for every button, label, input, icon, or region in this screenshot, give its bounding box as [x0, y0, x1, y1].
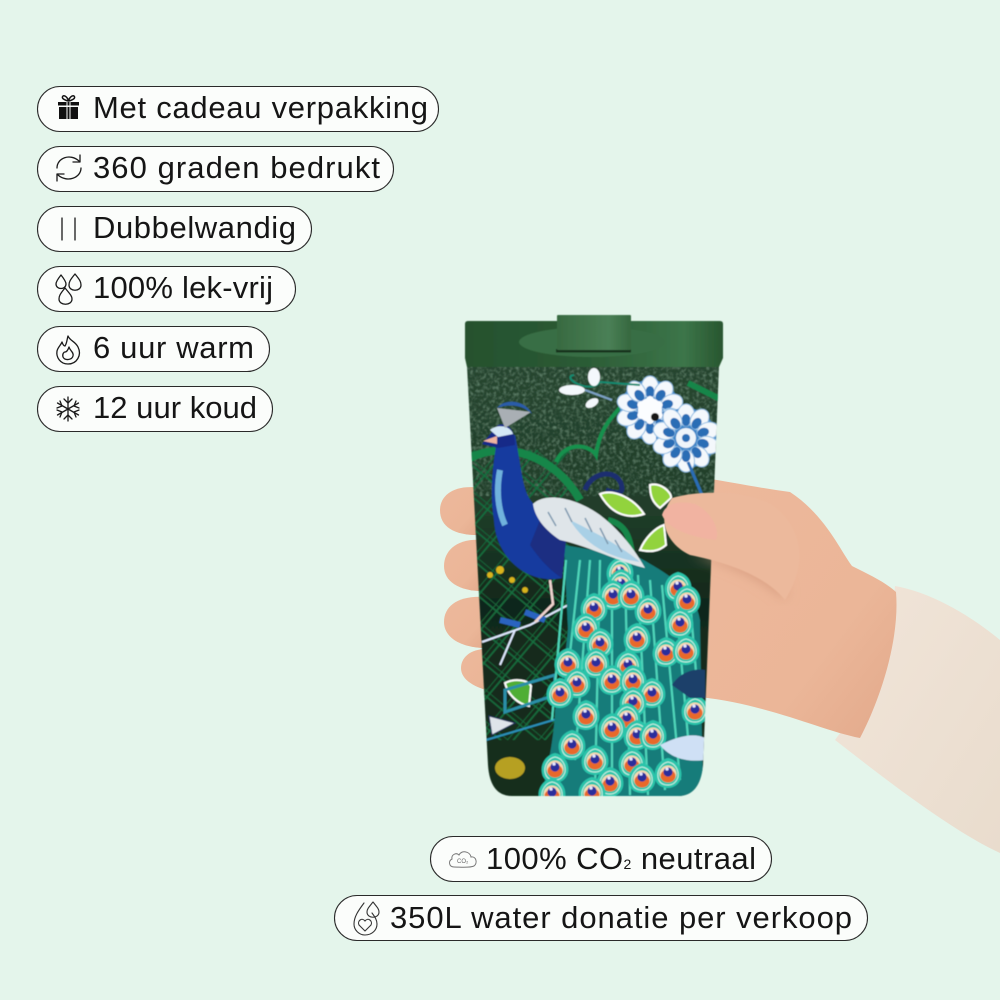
icon: snowflake — [57, 397, 79, 421]
icon: flame — [57, 336, 79, 364]
feature pills — [38, 86, 438, 432]
lid tab — [557, 315, 631, 350]
pill: 12 hours cold — [38, 386, 272, 432]
peacock body — [482, 402, 645, 622]
pill: CO2 neutral: 100% CO2 neutraal — [486, 841, 756, 876]
icon: CO2 cloud — [450, 852, 476, 867]
lower left branch and leaves — [482, 566, 568, 779]
hand: thumb over the tumbler — [662, 493, 799, 600]
icon: double wall lines — [62, 218, 75, 240]
pill: leak free — [38, 266, 296, 312]
pill: CO2 neutral — [430, 836, 772, 882]
hand: palm and fingers behind the tumbler — [440, 478, 897, 738]
pill: 6 hours warm: 6 uur warm — [93, 330, 254, 365]
icon: CO2 cloud: CO₂ — [457, 859, 469, 865]
peacock tail — [539, 545, 708, 808]
pill: double walled — [38, 206, 312, 252]
tumbler with peacock print — [460, 315, 730, 808]
tumbler body print — [460, 360, 730, 808]
icon: gift — [58, 96, 79, 119]
pill: 12 hours cold: 12 uur koud — [93, 390, 257, 425]
pill: leak free: 100% lek-vrij — [93, 270, 273, 305]
pill: water donation: 350L water donatie per verkoop — [390, 900, 852, 935]
white blue flowers — [615, 376, 721, 472]
pill: double walled: Dubbelwandig — [93, 210, 296, 245]
pill: gift wrapping — [38, 86, 438, 132]
pill: 6 hours warm — [38, 326, 270, 372]
icon: drop with heart — [354, 902, 379, 935]
pill: water donation — [334, 896, 868, 940]
icon: drops — [56, 274, 81, 304]
icon: rotate arrows — [57, 155, 81, 181]
sleeve — [835, 586, 1000, 853]
tumbler lid — [465, 315, 723, 367]
pill: gift wrapping: Met cadeau verpakking — [93, 90, 428, 125]
thumbnail — [662, 502, 717, 540]
pill: 360 degrees printed — [38, 146, 394, 192]
pill: 360 degrees printed: 360 graden bedrukt — [93, 150, 380, 185]
